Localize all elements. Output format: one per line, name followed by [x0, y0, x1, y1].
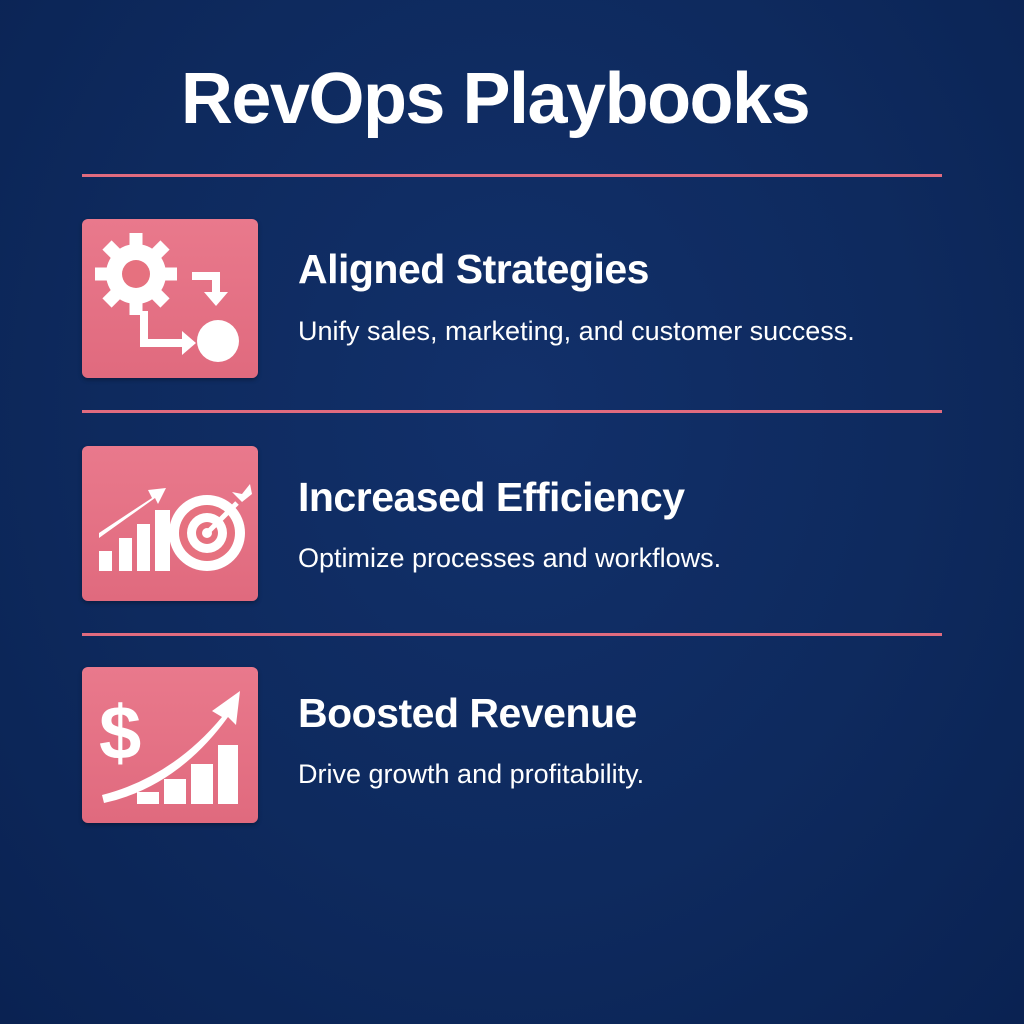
heading 1: Aligned Strategies — [298, 246, 649, 292]
heading 3: Boosted Revenue — [298, 690, 637, 736]
panel: revenue icon — [82, 667, 258, 823]
panel: efficiency icon — [82, 446, 258, 601]
heading 2: Increased Efficiency — [298, 474, 685, 520]
panel: revenue icon: $ — [99, 691, 141, 776]
title: RevOps Playbooks — [181, 59, 809, 139]
text 1: Unify sales, marketing, and customer success. — [298, 316, 855, 346]
panel: aligned strategies icon — [82, 219, 258, 378]
text 2: Optimize processes and workflows. — [298, 543, 721, 573]
text 3: Drive growth and profitability. — [298, 759, 644, 789]
